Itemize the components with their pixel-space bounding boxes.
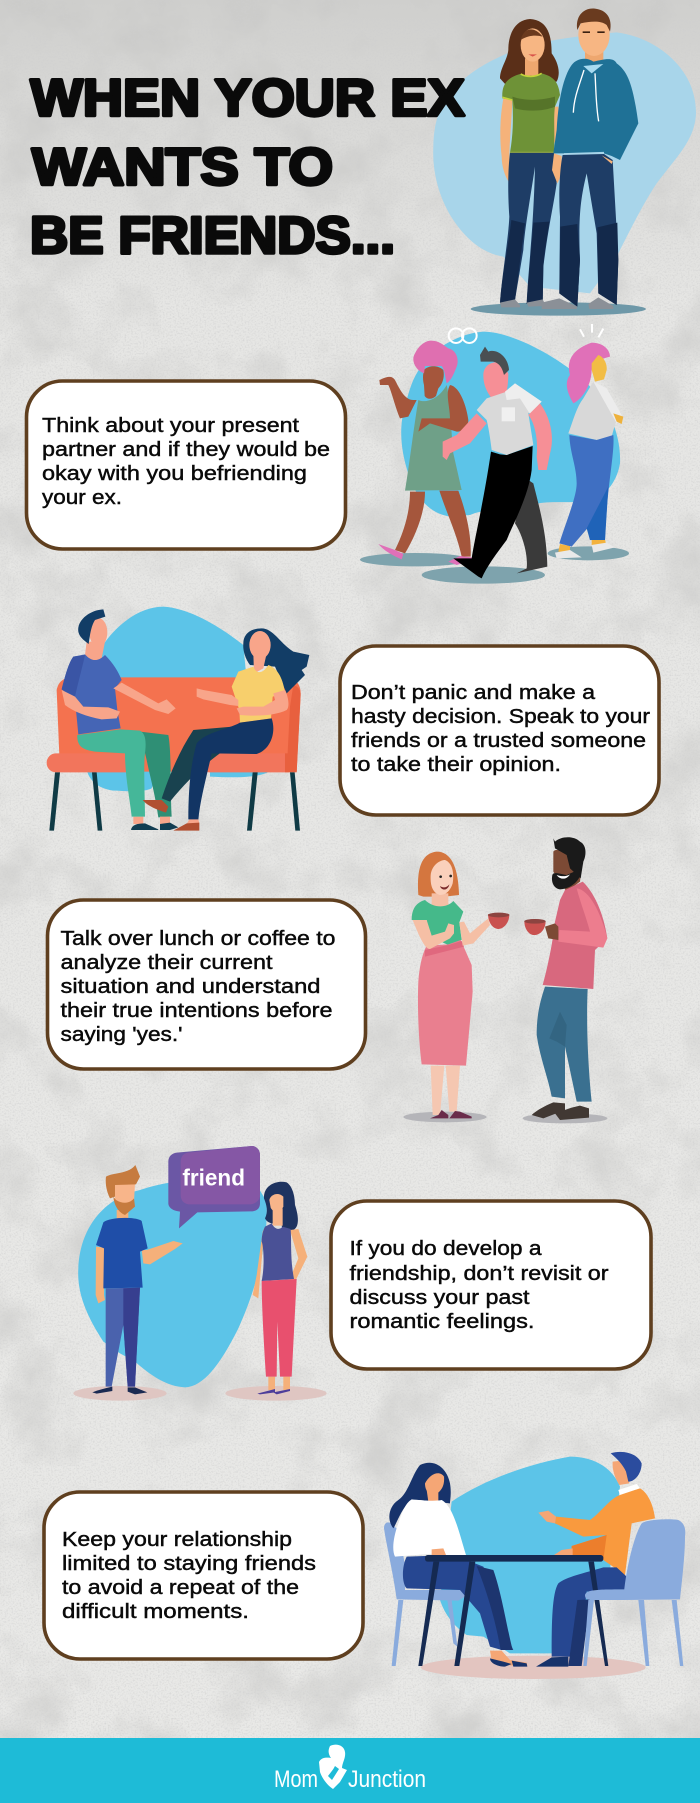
blue blob [78,1180,267,1387]
callout 3: talk over coffee: their true intentions before [60,1000,332,1022]
callout 1: present partner: partner and if they would be [42,439,330,461]
illustration: couple on a sofa [47,607,309,831]
illustration: two people at a table [384,1452,685,1679]
blue blob [440,1457,620,1653]
ground shadow [471,302,646,316]
ground shadows [73,1386,327,1401]
callout 2: do not panic [340,646,659,815]
speech bubble: friend [168,1146,260,1228]
callout 1: present partner: your ex. [42,487,122,509]
icon: alert sparks [580,324,603,337]
logo: MomJunction: Mom [274,1766,318,1793]
woman on the sofa [143,628,309,831]
man in teal hoodie [542,9,638,309]
man on the sofa [62,609,178,830]
illustration: two friends with speech bubble [73,1146,327,1401]
callout 1: present partner: okay with you befriending [42,463,307,485]
woman in pink skirt [412,852,490,1118]
illustration: two people having coffee [403,837,607,1123]
callout 2: do not panic: to take their opinion. [351,754,561,776]
callout 1: present partner: Think about your present [42,415,300,437]
logo: MomJunction: Junction [348,1766,426,1793]
icon: mother and child heart [319,1745,347,1789]
callout 5: stay friends: difficult moments. [62,1601,249,1623]
ground shadows [360,546,629,584]
callout 3: talk over coffee: Talk over lunch or coffee to [60,928,336,950]
callout 4: past romantic feelings: friendship, don’t revisit or [350,1263,609,1285]
illustration: couple standing [433,9,696,316]
footer band [0,1738,700,1803]
callout 5: stay friends: limited to staying friends [62,1553,316,1575]
woman walking away in blue jeans [555,343,623,558]
callout 4: past romantic feelings: If you do develop a [350,1238,542,1260]
blue blob [433,32,696,293]
right chair [583,1519,685,1666]
table [418,1555,608,1666]
callout 1: present partner [26,381,346,549]
coffee cups [488,913,546,935]
title: WANTS TO [32,138,333,196]
callout 3: talk over coffee: analyze their current [60,952,273,974]
callout 3: talk over coffee: saying 'yes.' [60,1024,182,1046]
bearded man in blue t-shirt [92,1165,183,1394]
man in grey shirt [443,347,552,578]
woman in red trousers [253,1182,307,1394]
callout 2: do not panic: friends or a trusted someone [351,730,646,752]
callout 4: past romantic feelings [331,1201,651,1369]
man in orange sweater [536,1452,655,1667]
blue blob [401,332,620,517]
speech bubble: friend: friend [182,1165,245,1191]
woman in green dress [378,341,472,565]
left chair [384,1522,465,1666]
callout 2: do not panic: hasty decision. Speak to your [351,706,650,728]
ground shadows [403,1112,607,1123]
bearded man in pink sweater [532,837,607,1120]
callout 3: talk over coffee [48,900,366,1069]
callout 5: stay friends: to avoid a repeat of the [62,1577,299,1599]
woman in green top [500,19,560,307]
title: WHEN YOUR EX [30,70,465,128]
woman in white top [389,1463,527,1667]
callout 4: past romantic feelings: discuss your past [350,1287,530,1309]
callout 3: talk over coffee: situation and understand [60,976,320,998]
title [30,70,465,265]
illustration: three people walking [360,324,629,584]
callout 2: do not panic: Don’t panic and make a [351,682,596,704]
title: BE FRIENDS... [30,207,395,265]
callout 4: past romantic feelings: romantic feelings. [350,1311,534,1333]
ground shadow [421,1656,646,1679]
blue blob [87,607,272,791]
sofa [47,677,301,831]
callout 5: stay friends: Keep your relationship [62,1529,292,1551]
icon: wedding rings [449,328,477,343]
logo: MomJunction [274,1745,426,1793]
callout 5: stay friends [44,1492,363,1659]
